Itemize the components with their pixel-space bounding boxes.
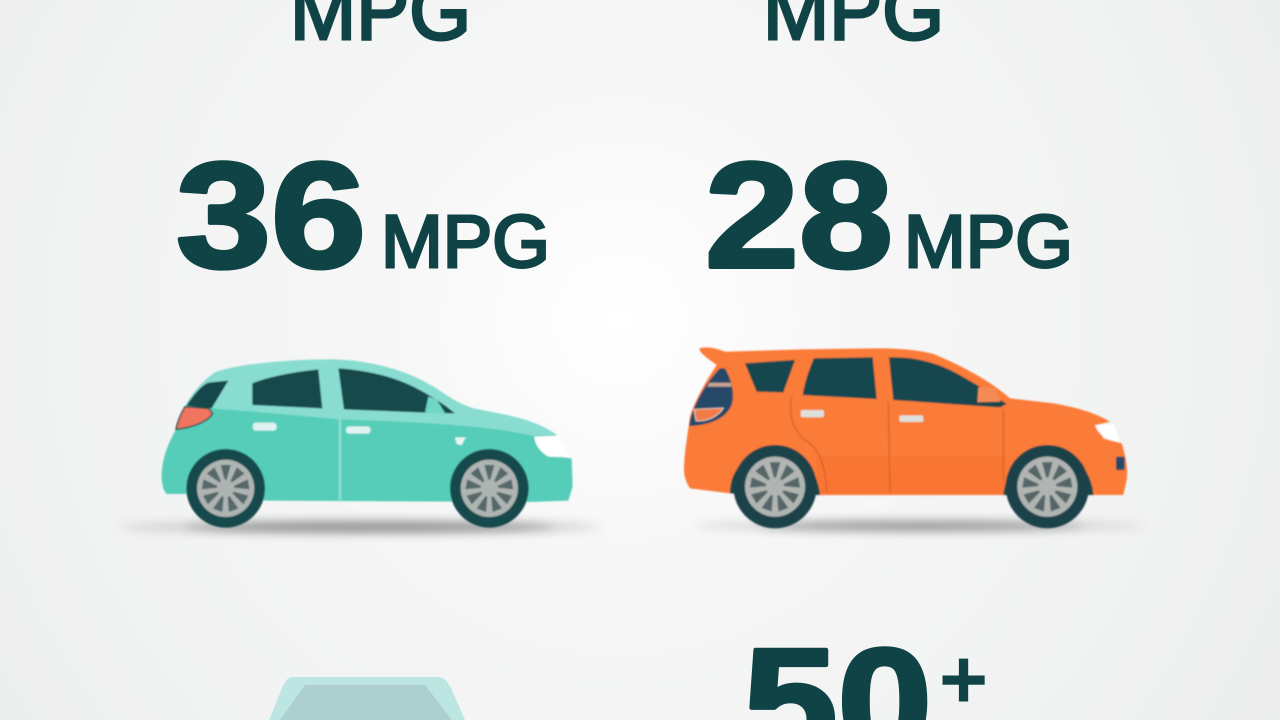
front wheel arch [1003,451,1093,495]
mirror [977,387,1001,402]
door seam [336,419,344,500]
tail light [176,407,213,429]
shadow: orange car [695,521,1145,531]
mirror [425,397,446,414]
stat: 36 MPG: 36 [176,131,366,299]
icon: cropped hexagon badge [269,677,465,720]
stat: 36 MPG: MPG [381,200,550,283]
headlight [534,436,570,457]
rear side window [745,360,795,392]
rear wheel [733,445,817,528]
car body [162,359,573,502]
tail light [694,408,723,421]
stat: 36 MPG [176,131,550,299]
headlight [1095,424,1120,442]
lower body shade [817,457,1007,495]
stat: 28 MPG [705,131,1073,299]
rear wheel [186,449,265,528]
car upper cabin [187,359,557,436]
rear side window [252,369,322,408]
rear window [187,381,228,408]
door handles [801,410,824,417]
door seams [791,397,1003,493]
shadow: teal car [120,521,600,533]
icon: orange SUV car [684,347,1127,528]
middle side window [803,357,877,399]
front side window [889,357,1007,407]
front badge [1116,457,1125,470]
front side window [338,368,455,413]
stat: 28 MPG: MPG [904,200,1073,283]
rear wheel arch [730,451,820,495]
rear light stripe [707,383,732,387]
front wheel [1006,445,1089,528]
front wheel [450,449,529,528]
door handles [253,423,277,431]
icon: teal hatchback car [162,359,573,528]
rear light cluster [689,368,733,426]
car body [684,347,1127,495]
stat: 28 MPG: 28 [705,131,893,299]
stat: 50+ [743,617,988,720]
mirror reflection [455,437,466,445]
